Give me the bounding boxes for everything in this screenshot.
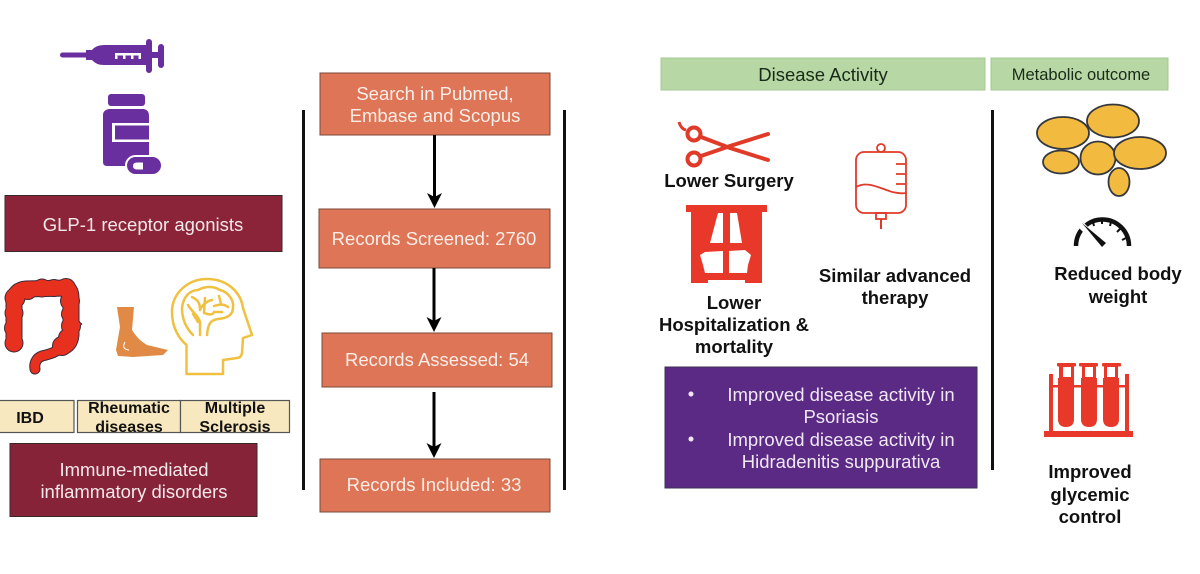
flow box: search: Search in Pubmed, — [356, 83, 514, 104]
flow box: screened — [319, 209, 550, 268]
header: Metabolic outcome: Metabolic outcome — [1012, 66, 1150, 84]
label: Similar advanced therapy: Similar advanced — [819, 265, 971, 286]
cell: IBD — [0, 400, 74, 432]
header: Disease Activity: Disease Activity — [758, 64, 889, 85]
arrow: search to screened — [427, 135, 442, 208]
bullet 1: • — [688, 383, 694, 404]
label: Improved glycemic control: Improved — [1048, 461, 1132, 482]
label: Reduced body weight: weight — [1088, 286, 1147, 307]
box: GLP-1 receptor agonists: GLP-1 receptor agonists — [43, 214, 243, 235]
bullet 1: Psoriasis — [803, 406, 879, 427]
label: Improved glycemic control — [1048, 461, 1132, 527]
divider middle — [563, 110, 566, 490]
cell: Multiple Sclerosis — [180, 400, 290, 436]
flow box: included — [320, 459, 550, 512]
icon: colon — [4, 278, 82, 369]
flow box: included: Records Included: 33 — [347, 474, 521, 495]
icon: syringe — [60, 39, 164, 73]
label: Similar advanced therapy: therapy — [862, 287, 929, 308]
cell: Rheumatic diseases: diseases — [95, 419, 163, 436]
bullet 2: Improved disease activity in — [727, 429, 955, 450]
label: Lower Hospitalization & mortality: Lower — [707, 292, 761, 313]
label: Improved glycemic control: glycemic — [1050, 484, 1130, 505]
label: Reduced body weight: Reduced body — [1054, 263, 1182, 284]
arrow: assessed to included — [426, 392, 442, 458]
icon: test tubes — [1044, 363, 1133, 437]
box: Immune-mediated inflammatory disorders: inflammatory disorders — [40, 481, 228, 502]
flow box: screened: Records Screened: 2760 — [332, 228, 536, 249]
flow box: search: Embase and Scopus — [350, 105, 520, 126]
cell: Rheumatic diseases: Rheumatic — [88, 400, 170, 417]
cell: Rheumatic diseases — [78, 400, 180, 436]
icon: fat cells — [1037, 104, 1166, 196]
divider right — [991, 110, 994, 470]
cell: IBD: IBD — [16, 410, 44, 427]
box: GLP-1 receptor agonists — [5, 196, 282, 252]
panel: improved disease activity — [665, 367, 977, 488]
header: Disease Activity — [661, 58, 985, 90]
icon: head with brain — [172, 279, 252, 374]
bullet 1: Improved disease activity in — [727, 384, 955, 405]
label: Reduced body weight — [1054, 263, 1182, 307]
table: disease categories — [0, 400, 290, 436]
bullet 2: • — [688, 428, 694, 449]
bullet 1 — [688, 383, 955, 427]
flow box: assessed — [322, 333, 552, 387]
icon: foot — [116, 307, 168, 357]
flow box: assessed: Records Assessed: 54 — [345, 349, 529, 370]
flow box: search — [320, 73, 550, 135]
bullet 2: Hidradenitis suppurativa — [742, 451, 941, 472]
label: Improved glycemic control: control — [1059, 506, 1121, 527]
arrow: screened to assessed — [426, 268, 442, 332]
label: Lower Hospitalization & mortality — [659, 292, 809, 357]
icon: scissors — [679, 122, 768, 166]
cell: Multiple Sclerosis: Sclerosis — [199, 419, 271, 436]
icon: IV bag — [856, 144, 906, 229]
icon: pill bottle — [103, 94, 162, 175]
icon: weight gauge — [1076, 220, 1129, 247]
icon: hospital window — [686, 205, 767, 283]
box: Immune-mediated inflammatory disorders: Immune-mediated — [59, 459, 209, 480]
box: Immune-mediated inflammatory disorders — [10, 444, 257, 516]
divider left — [302, 110, 305, 490]
label: Lower Surgery: Lower Surgery — [664, 170, 794, 191]
label: Lower Hospitalization & mortality: mortality — [695, 336, 774, 357]
bullet 2 — [688, 428, 955, 472]
label: Lower Hospitalization & mortality: Hospitalization & — [659, 314, 809, 335]
cell: Multiple Sclerosis: Multiple — [205, 400, 265, 417]
label: Similar advanced therapy — [819, 265, 971, 308]
header: Metabolic outcome — [991, 58, 1168, 90]
